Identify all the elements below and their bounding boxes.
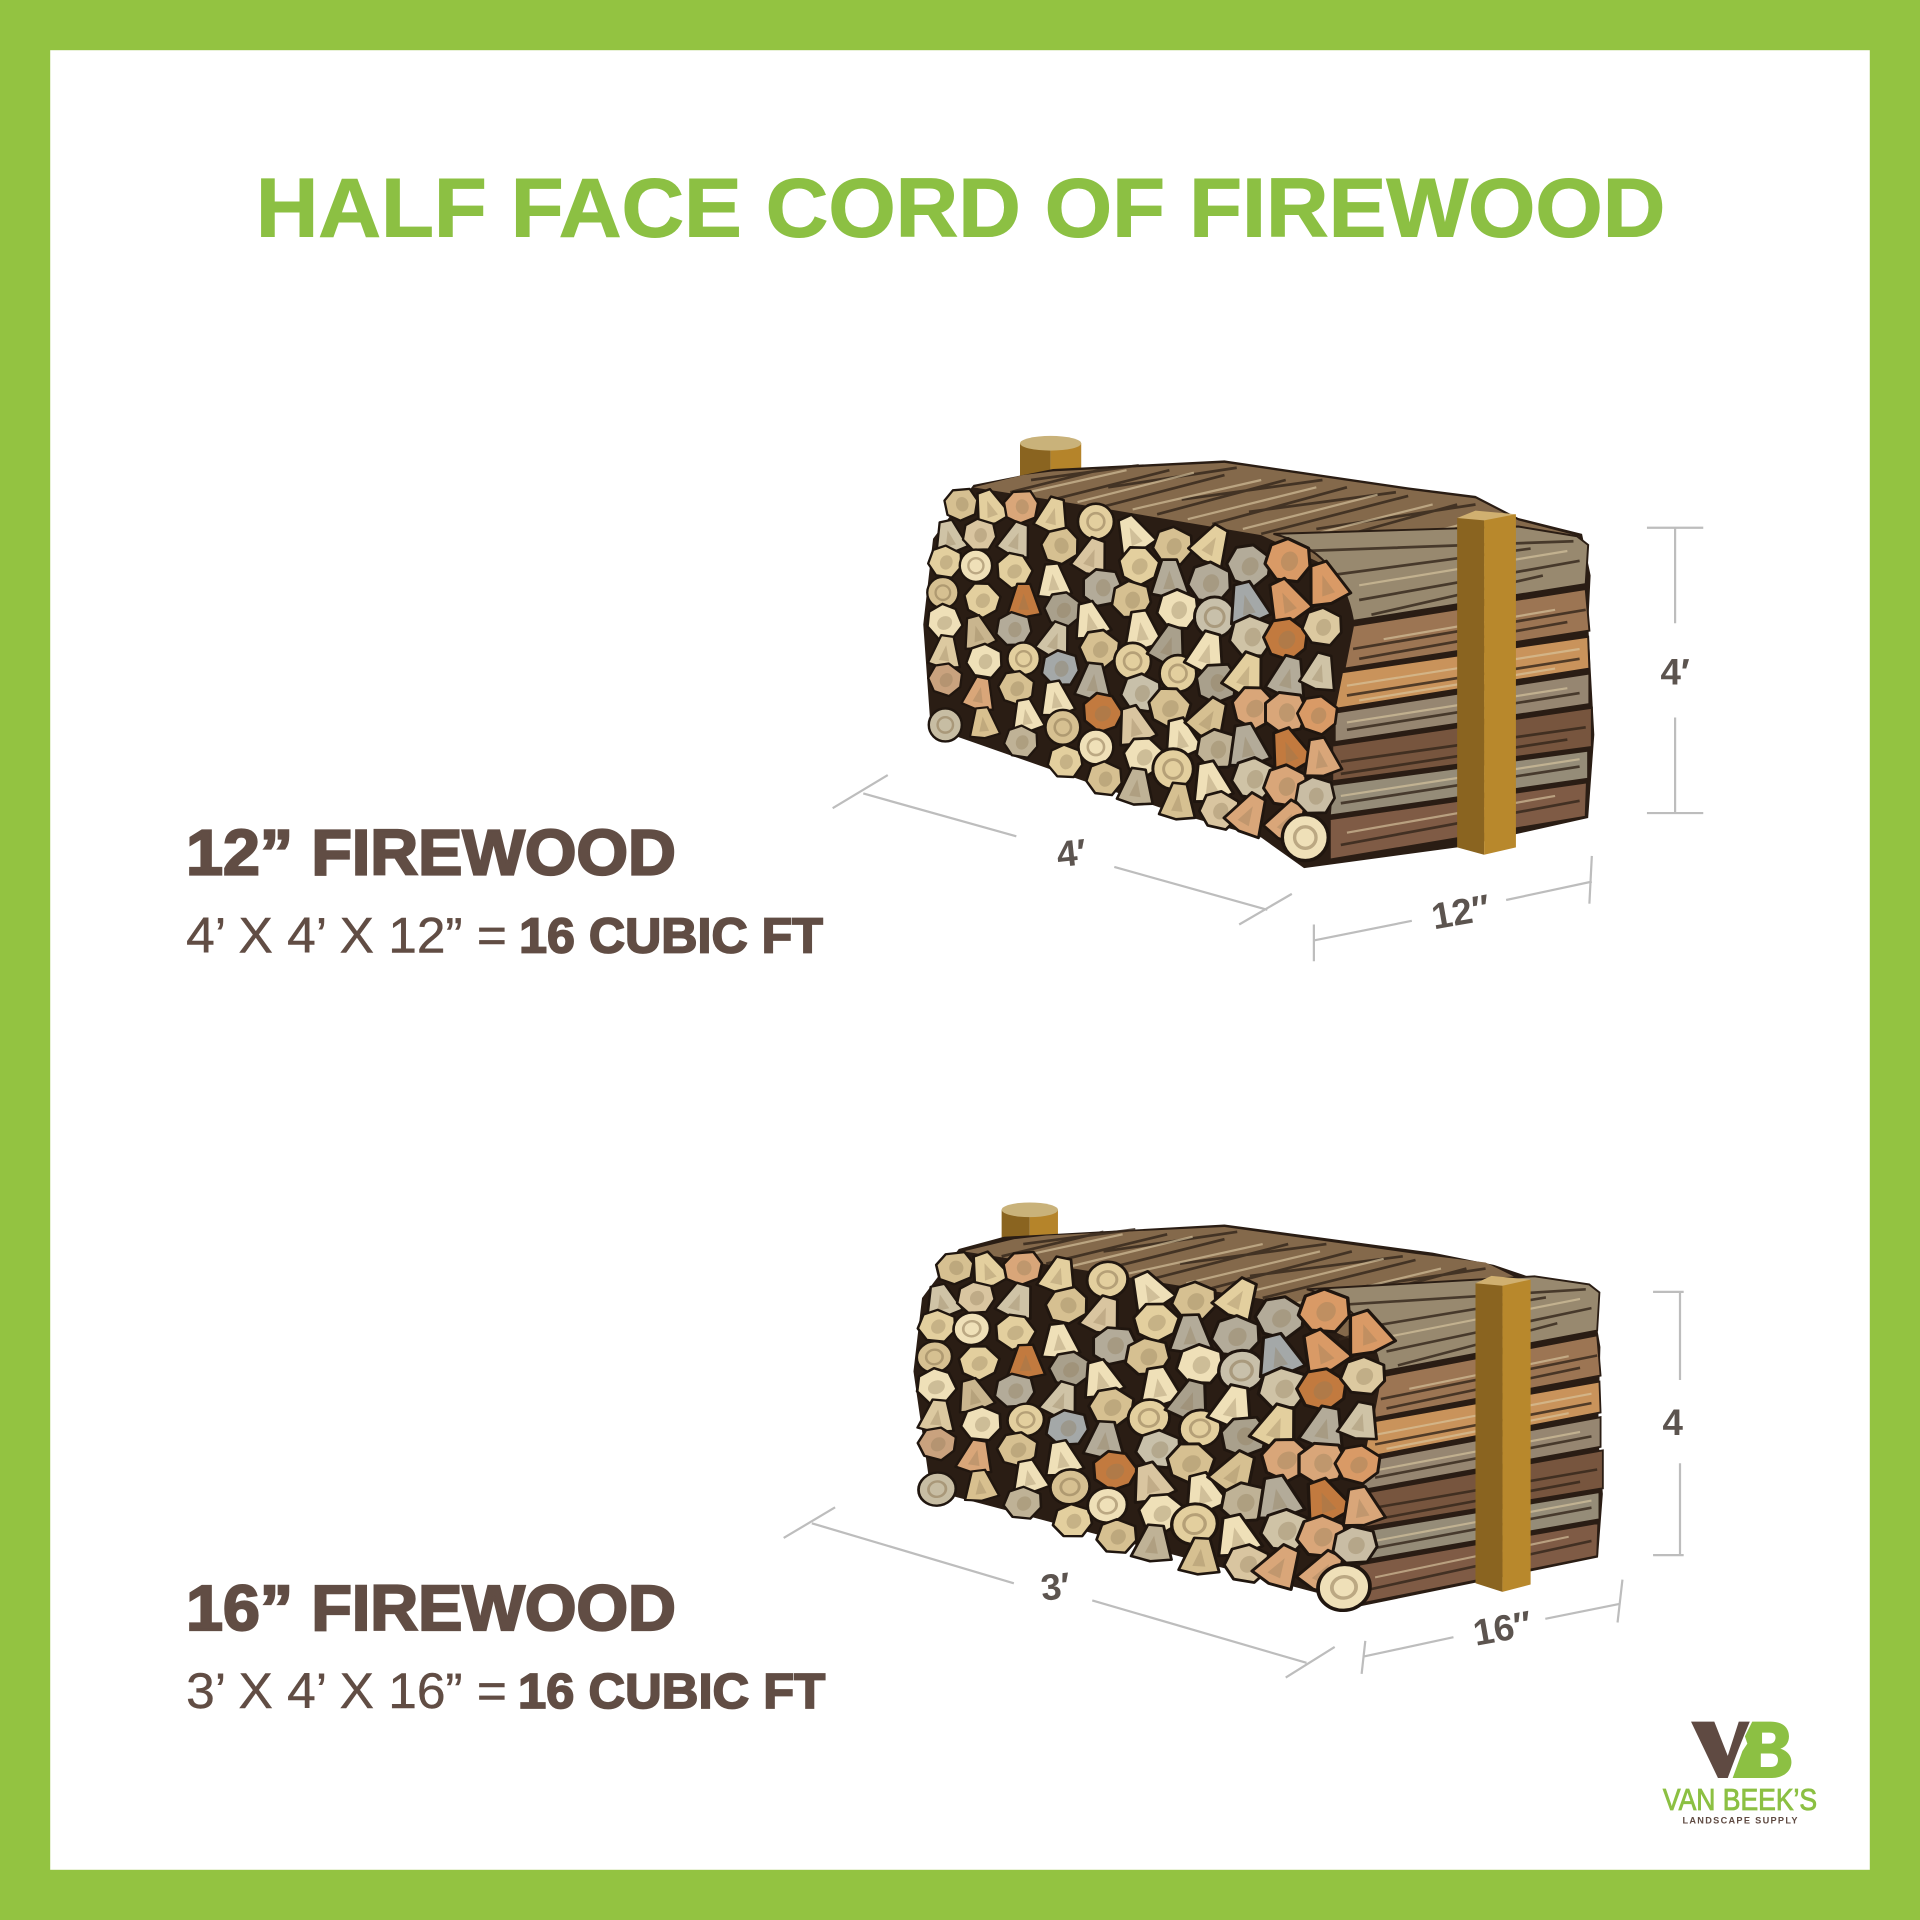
top of logs xyxy=(973,463,1580,576)
dimension: 12 inch stack length xyxy=(833,775,1292,924)
round log faces xyxy=(922,485,1352,861)
panel: 12 inch firewood text xyxy=(186,817,823,964)
dimension: 12 inch stack depth xyxy=(1314,856,1592,961)
panel: 16 inch firewood text xyxy=(186,1573,825,1719)
split log ends along the side xyxy=(1273,527,1592,860)
front post xyxy=(1476,1276,1531,1592)
dimension: 12 inch stack length: 4′ xyxy=(1055,831,1088,875)
title: HALF FACE CORD OF FIREWOOD xyxy=(256,161,1665,254)
dimension: 16 inch stack height xyxy=(1653,1292,1684,1555)
dimension: 12 inch stack height xyxy=(1647,528,1703,813)
dimension: 16 inch stack length: 3′ xyxy=(1039,1565,1072,1609)
dimension: 16 inch stack depth xyxy=(1362,1580,1622,1674)
result: 12 inch volume: 16 CUBIC FT xyxy=(519,910,823,964)
top of logs xyxy=(963,1227,1594,1340)
back post xyxy=(1020,436,1081,480)
dimension: 16 inch stack height: 4 xyxy=(1662,1402,1683,1443)
dimension: 16 inch stack depth: 16″ xyxy=(1470,1603,1535,1654)
formula: 12 inch dimensions: 4’ X 4’ X 12” = xyxy=(186,908,507,964)
logo mark: V xyxy=(1691,1722,1750,1778)
heading: 16 inch firewood: 16” FIREWOOD xyxy=(186,1573,676,1644)
dimension: 12 inch stack height: 4′ xyxy=(1660,651,1690,692)
logo: Van Beek's Landscape Supply xyxy=(1663,1722,1817,1825)
logo wordmark: VAN BEEK’S xyxy=(1663,1783,1817,1817)
dimension: 12 inch stack depth: 12″ xyxy=(1428,887,1493,937)
back post xyxy=(1002,1202,1058,1244)
stack silhouette xyxy=(923,460,1594,868)
logo mark: B xyxy=(1733,1722,1791,1778)
illustration: 12 inch firewood stack xyxy=(922,436,1594,868)
round log faces xyxy=(910,1233,1397,1626)
stack silhouette xyxy=(913,1224,1603,1607)
front post xyxy=(1457,511,1516,855)
heading: 12 inch firewood: 12” FIREWOOD xyxy=(186,817,676,888)
illustration: 16 inch firewood stack xyxy=(910,1202,1603,1626)
result: 16 inch volume: 16 CUBIC FT xyxy=(518,1665,825,1719)
split log ends along the side xyxy=(1307,1275,1603,1605)
logo tagline: LANDSCAPE SUPPLY xyxy=(1682,1815,1798,1825)
dimension: 16 inch stack length xyxy=(784,1507,1335,1678)
formula: 16 inch dimensions: 3’ X 4’ X 16” = xyxy=(186,1663,507,1719)
